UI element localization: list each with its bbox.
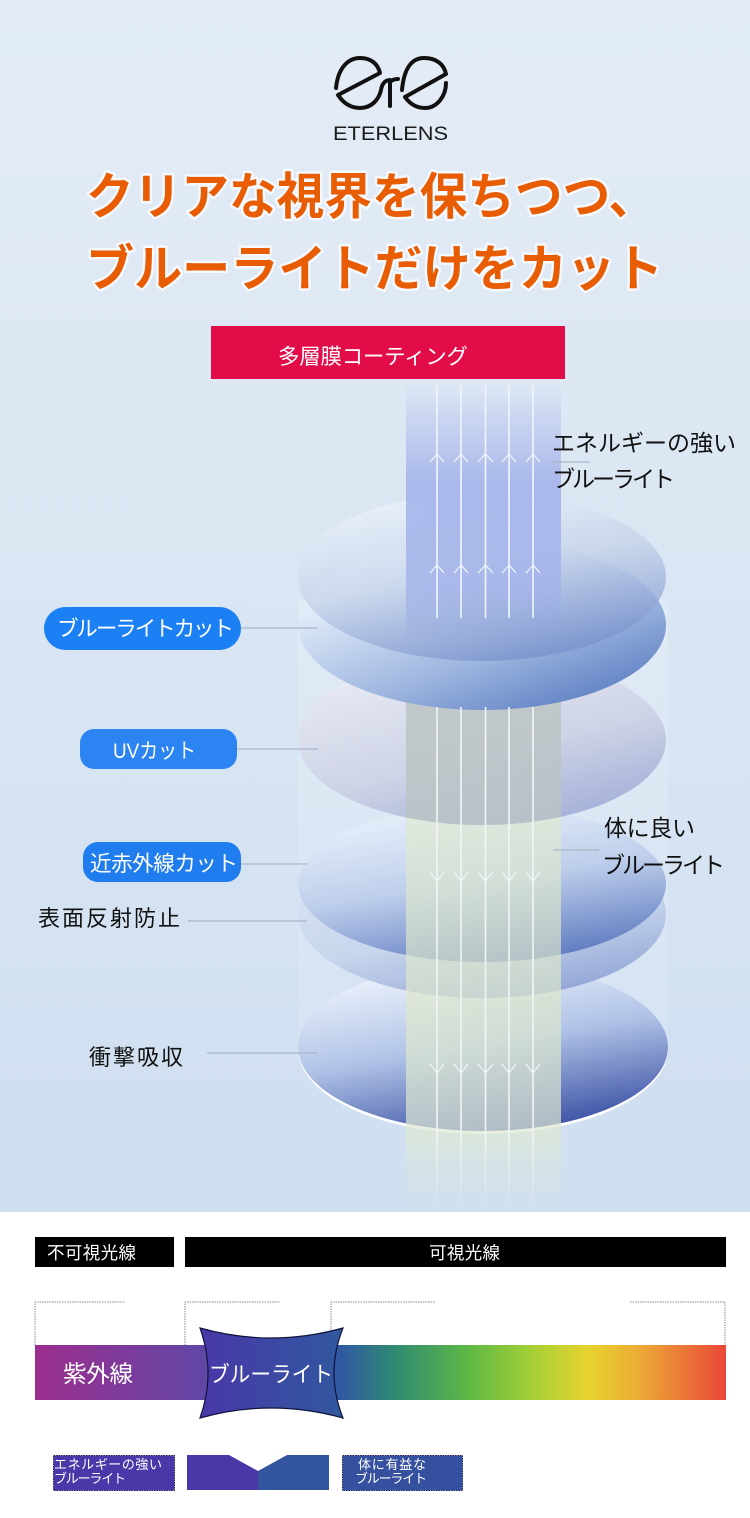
dotted range brackets	[35, 1302, 725, 1345]
heading: multilayer coating	[211, 326, 565, 379]
blue light badge: ブルーライト	[209, 1362, 333, 1387]
callout: high-energy blue light: エネルギーの強い	[552, 430, 736, 456]
callout: beneficial blue light	[602, 815, 725, 878]
title	[86, 169, 663, 297]
heading: multilayer coating: 多層膜コーティング	[278, 345, 468, 369]
title: ブルーライトだけをカット	[86, 241, 663, 297]
pill: near infrared cut	[83, 842, 241, 882]
light rays and arrows	[430, 385, 540, 1205]
spectrum bar	[35, 1345, 726, 1400]
box: high-energy blue light: エネルギーの強い	[54, 1457, 162, 1472]
background panel	[0, 0, 750, 1212]
header: invisible light	[35, 1237, 174, 1267]
callout: beneficial blue light: 体に良い	[604, 815, 695, 841]
label: ultraviolet: 紫外線	[63, 1361, 133, 1387]
callout: high-energy blue light	[552, 430, 736, 492]
callout: high-energy blue light: ブルーライト	[552, 466, 675, 492]
box: beneficial blue light: 体に有益な	[358, 1457, 426, 1472]
label: impact absorption: 衝撃吸収	[89, 1045, 183, 1070]
light beam: lower	[406, 702, 561, 1172]
callout: beneficial blue light: ブルーライト	[602, 852, 725, 878]
logo	[333, 58, 448, 145]
pill: UV cut	[80, 729, 237, 769]
header: invisible light: 不可視光線	[47, 1243, 136, 1263]
logo: ETERLENS	[333, 123, 448, 145]
header: visible light	[185, 1237, 726, 1267]
white spectrum panel	[0, 1212, 750, 1518]
light beam: upper	[406, 385, 561, 640]
box: beneficial blue light	[342, 1456, 462, 1490]
pill: blue light cut	[44, 607, 241, 650]
lens stack	[298, 385, 668, 1210]
notched divider block	[187, 1455, 329, 1490]
box: high-energy blue light	[54, 1456, 174, 1490]
pill: UV cut: UVカット	[113, 740, 196, 763]
pill: near infrared cut: 近赤外線カット	[90, 852, 238, 876]
pill: blue light cut: ブルーライトカット	[57, 617, 234, 641]
box: high-energy blue light: ブルーライト	[54, 1471, 126, 1486]
blue light badge	[200, 1328, 343, 1418]
header: visible light: 可視光線	[429, 1243, 500, 1263]
box: beneficial blue light: ブルーライト	[355, 1471, 427, 1486]
title: クリアな視界を保ちつつ、	[86, 169, 656, 225]
leader lines	[188, 462, 599, 1053]
label: anti-reflection: 表面反射防止	[38, 906, 180, 931]
